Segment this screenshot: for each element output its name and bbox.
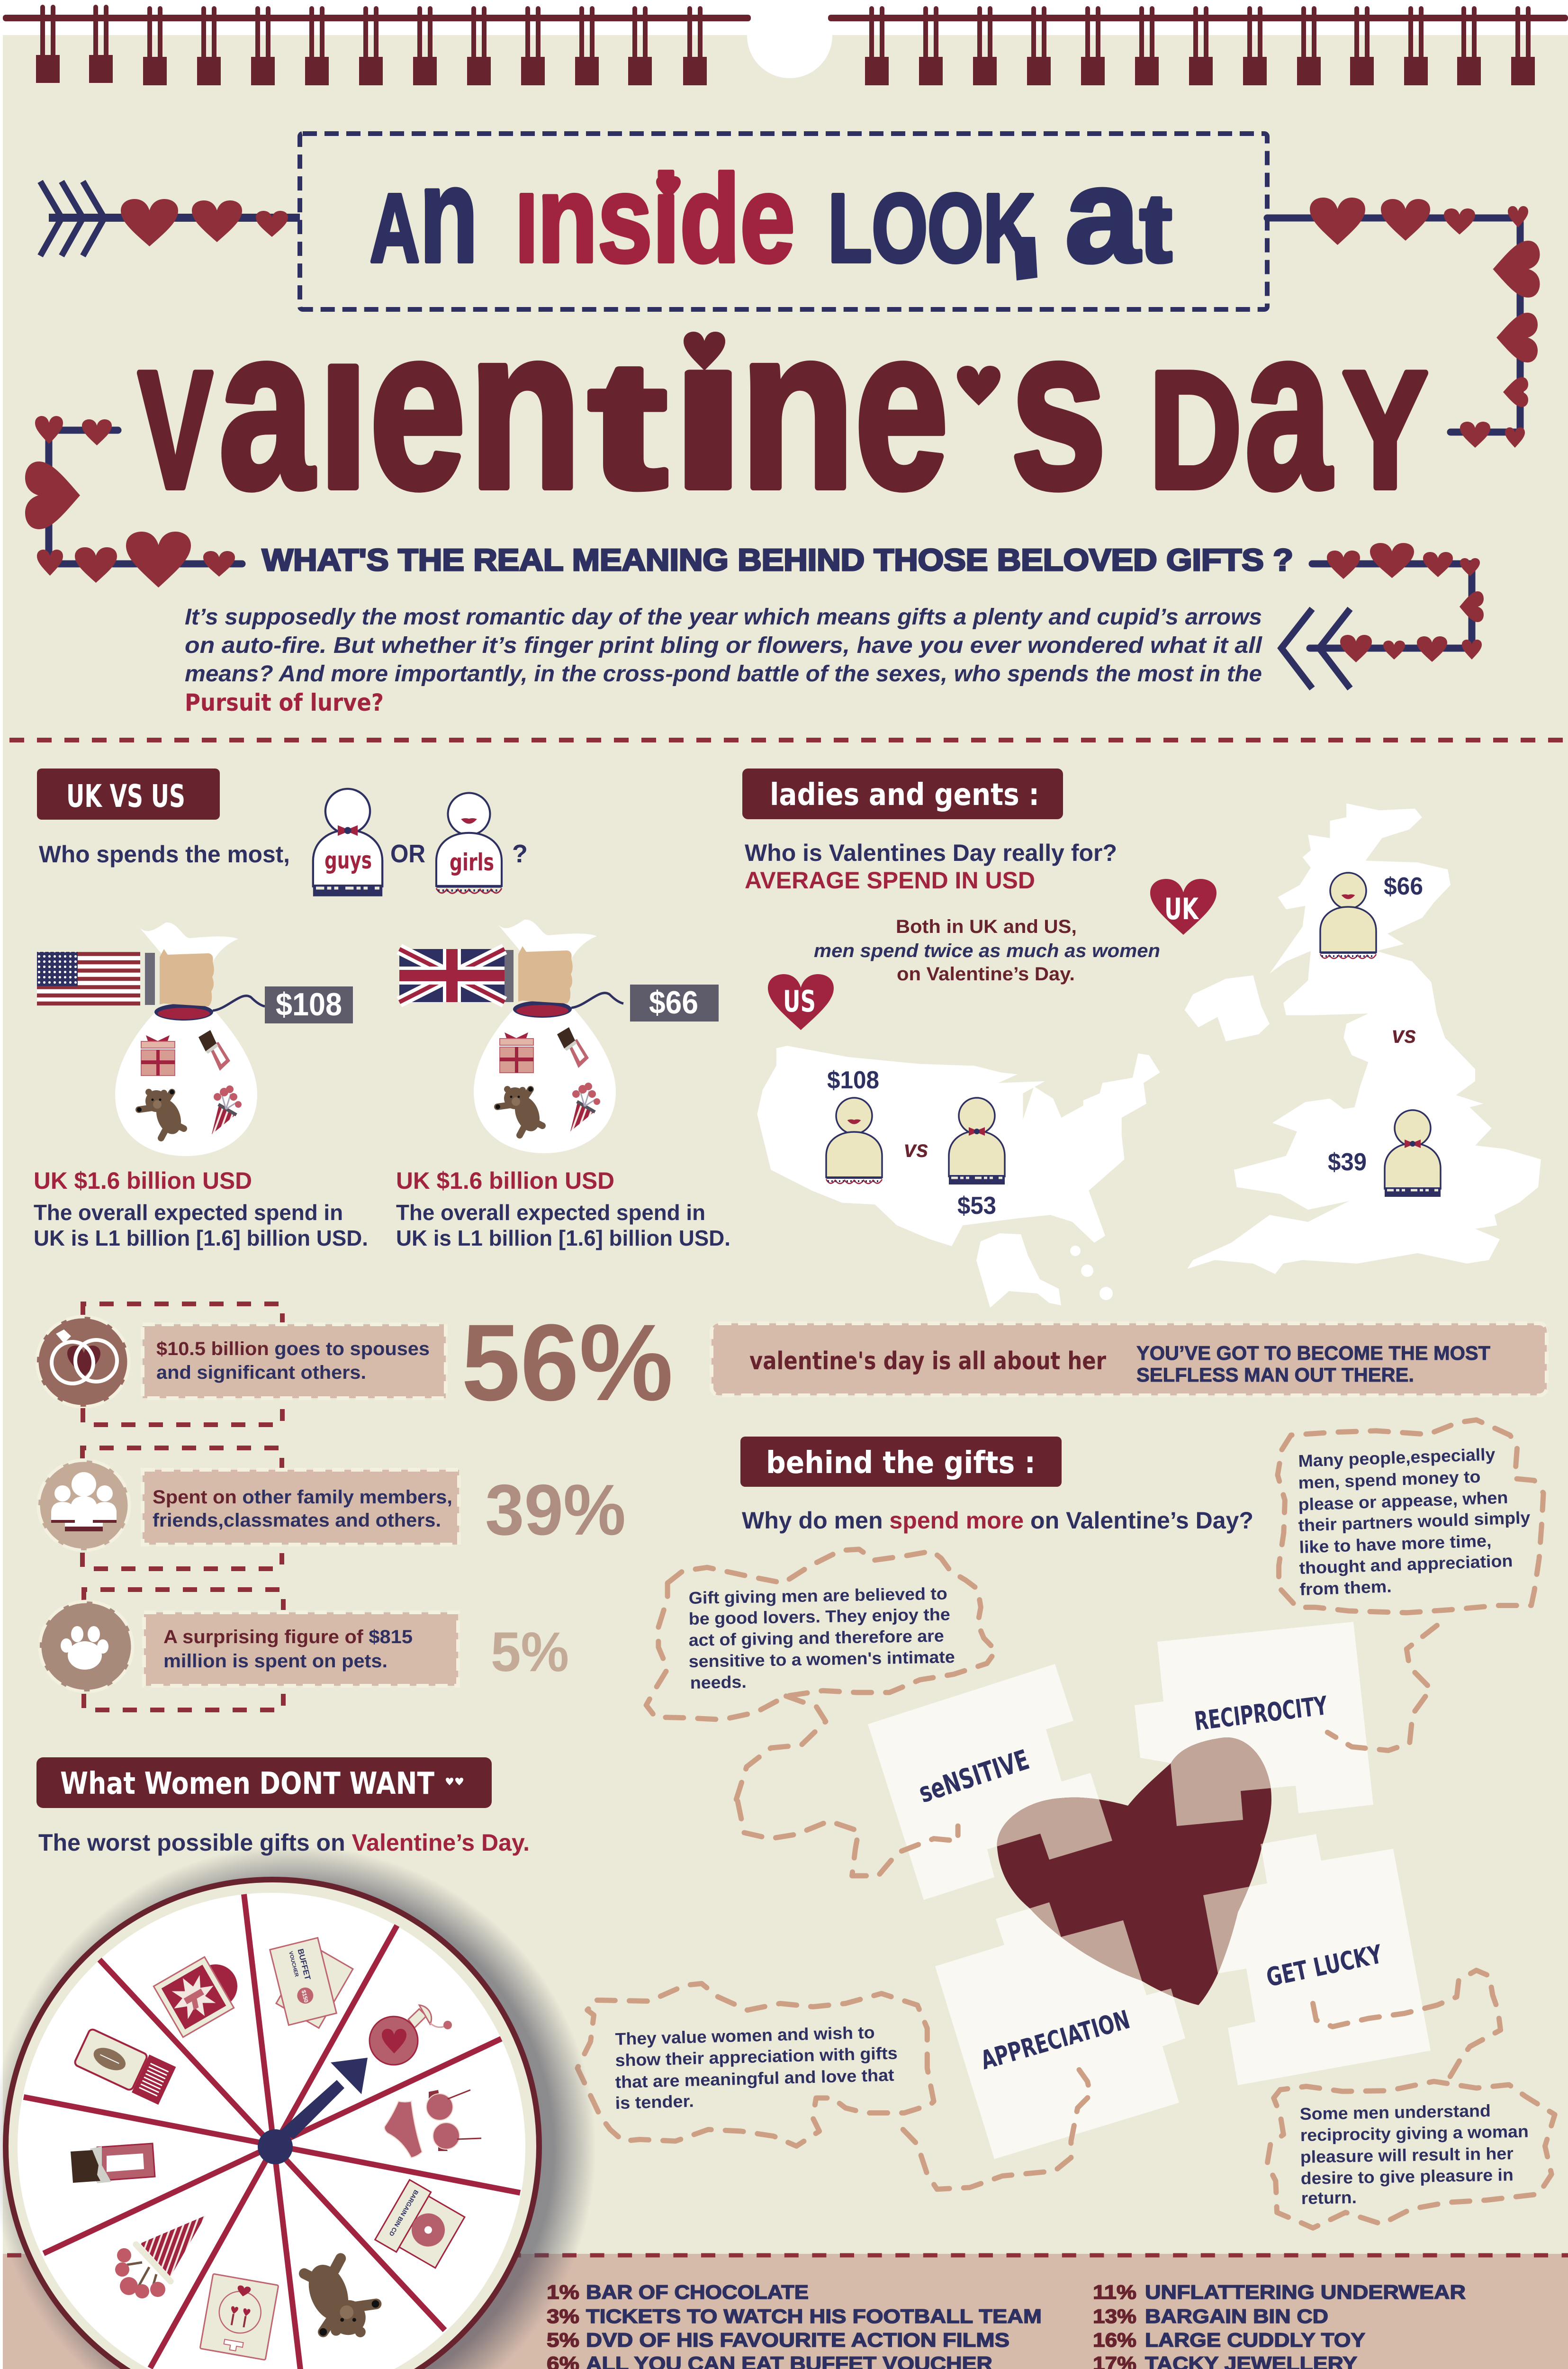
heart badge: US: US: [783, 984, 816, 1019]
title: An Inside Look at: [370, 140, 1172, 290]
arrow with hearts, top left: [40, 181, 300, 256]
thought bubble: good lovers: [646, 1549, 996, 1876]
arrow with hearts, middle right: [1281, 543, 1484, 688]
thought bubble: reciprocity: reciprocity giving a woman: [1300, 2122, 1529, 2145]
thought bubble: please or appease: Many people,especially: [1298, 1445, 1496, 1471]
list: worst gifts left column: 3%: [547, 2305, 579, 2327]
note: men spend twice: on Valentine’s Day.: [897, 964, 1075, 985]
heading: what women dont want: What Women DONT WANT: [60, 1766, 434, 1801]
label: vs UK: vs: [1392, 1022, 1416, 1048]
stat: 39% family: Spent on other family members,: [153, 1487, 452, 1508]
heart badge: UK: UK: [1164, 892, 1199, 926]
main title: Valentine's Day: e: [369, 280, 466, 536]
intro paragraph: It’s supposedly the most romantic day of the year which means gifts a plenty and cupid’s arrows: [185, 605, 1262, 630]
heart badge: US: [768, 974, 834, 1030]
figure: UK woman $66: [1320, 873, 1423, 958]
thought bubble: good lovers: needs.: [690, 1672, 747, 1692]
arrow line with hearts, middle left: [25, 416, 242, 588]
list: worst gifts right column: 11%: [1093, 2281, 1136, 2303]
calendar spiral rings: [3, 7, 1568, 85]
icon: buffet vouchers: $150: [300, 1989, 310, 2003]
question: who is Valentines Day for: Who is Valentines Day really for?: [745, 840, 1117, 866]
icon: chocolate bar: [71, 2143, 155, 2183]
banner: all about her: [712, 1323, 1547, 1395]
wheel shadow: [0, 1848, 596, 2369]
thought bubble: please or appease: thought and appreciation: [1299, 1551, 1513, 1578]
thought bubble: appreciation: is tender.: [615, 2091, 694, 2113]
label: vs US: vs: [904, 1136, 928, 1162]
thought bubble: good lovers: sensitive to a women's intimate: [688, 1647, 955, 1671]
money bag: UK: [399, 920, 719, 1153]
heading: UK VS US: UK VS US: [66, 778, 185, 814]
list: worst gifts left column: [547, 2281, 1042, 2369]
intro paragraph: means? And more importantly, in the cross-pond battle of the sexes, who spends the most in the: [185, 661, 1262, 687]
icon: paw: [40, 1601, 133, 1691]
bottom band: [3, 2254, 1568, 2369]
figure: guys: guys: [324, 847, 372, 874]
question: who spends the most: Who spends the most,: [39, 841, 290, 868]
question mark: ?: [512, 840, 528, 868]
intro paragraph: on auto-fire. But whether it’s finger print bling or flowers, have you ever wondered what it all: [185, 633, 1263, 658]
list: worst gifts right column: LARGE CUDDLY TOY: [1145, 2329, 1365, 2351]
stat: 56% spouses: [37, 1302, 673, 1425]
main title: Valentine's Day: a: [1245, 280, 1332, 536]
figure: UK man $39: [1328, 1110, 1441, 1197]
main title: Valentine's Day: n: [740, 280, 855, 536]
heading: ladies and gents: ladies and gents :: [770, 778, 1039, 813]
icon: bargain bin CD: [375, 2180, 467, 2273]
list: worst gifts left column: 5%: [547, 2329, 579, 2351]
banner: all about her: YOU’VE GOT TO BECOME THE MOST: [1136, 1342, 1490, 1364]
price tag: $66: [630, 985, 719, 1022]
thought bubble: please or appease: [1278, 1420, 1543, 1750]
price tag: $108: $108: [276, 986, 342, 1022]
title: An Inside Look at: An: [370, 140, 478, 290]
arrow line with hearts, top right: [1267, 198, 1540, 448]
figure: girls: [436, 793, 502, 893]
icon: teddy bear: [302, 2259, 379, 2337]
main title: Valentine's Day: e: [855, 280, 948, 536]
figure: US woman $108: $108: [827, 1067, 879, 1094]
thought bubble: please or appease: men, spend money to: [1298, 1467, 1481, 1492]
thought bubble: reciprocity: Some men understand: [1299, 2101, 1491, 2124]
banner: all about her: SELFLESS MAN OUT THERE.: [1136, 1364, 1414, 1386]
thought bubble: good lovers: act of giving and therefore are: [688, 1626, 944, 1650]
caption: left spend: UK $1.6 billion USD: [34, 1167, 252, 1194]
subheading: worst possible gifts: The worst possible gifts on Valentine’s Day.: [38, 1829, 530, 1856]
icon: football tickets: [73, 2027, 176, 2105]
word: OR: OR: [390, 840, 425, 868]
caption: right spend: The overall expected spend in: [396, 1200, 705, 1225]
thought bubble: reciprocity: [1267, 1970, 1555, 2228]
stat: 39% family: [38, 1448, 626, 1569]
icon: buffet vouchers: [270, 1938, 353, 2028]
map: UK: [1185, 804, 1541, 1274]
figure: girls: girls: [450, 849, 494, 876]
icon: petrol station flowers: [115, 2215, 206, 2298]
heading: behind the gifts: behind the gifts :: [766, 1446, 1036, 1481]
heart badge: UK: [1150, 879, 1217, 935]
puzzle label: Get Lucky: GET LUCKY: [1264, 1939, 1385, 1993]
main title: Valentine's Day: s: [1010, 280, 1107, 536]
note: men spend twice: men spend twice as much as women: [814, 940, 1160, 961]
thought bubble: reciprocity: pleasure will result in her: [1300, 2143, 1514, 2167]
figure: US man $53: $53: [957, 1192, 996, 1220]
stat: 5% pets: A surprising figure of $815: [163, 1627, 413, 1647]
question: why do men spend more: Why do men spend more on Valentine’s Day?: [742, 1507, 1253, 1534]
heading: UK VS US: [37, 769, 220, 820]
thought bubble: please or appease: please or appease, when: [1298, 1488, 1508, 1514]
caption: left spend: UK is L1 billion [1.6] billion USD.: [34, 1226, 368, 1250]
thought bubble: appreciation: They value women and wish to: [615, 2023, 875, 2049]
icon: underwear: [385, 2090, 481, 2158]
list: worst gifts left column: DVD OF HIS FAVOURITE ACTION FILMS: [586, 2329, 1009, 2351]
thought bubble: good lovers: be good lovers. They enjoy the: [688, 1604, 950, 1628]
caption: right spend: UK is L1 billion [1.6] billion USD.: [396, 1226, 730, 1250]
icon: wedding rings: [37, 1317, 129, 1407]
figure: US woman $108: [826, 1067, 882, 1184]
stat: 5% pets: million is spent on pets.: [163, 1651, 387, 1672]
list: worst gifts right column: UNFLATTERING UNDERWEAR: [1145, 2281, 1466, 2303]
flag: US: [37, 952, 140, 1005]
question: who is Valentines Day for: AVERAGE SPEND IN USD: [745, 867, 1035, 894]
stat: 56% spouses: and significant others.: [156, 1362, 366, 1383]
puzzle label: Reciprocity: RECIPROCITY: [1193, 1691, 1329, 1736]
wheel spokes: [24, 1894, 520, 2369]
main title: Valentine's Day: n: [469, 280, 582, 536]
main title: Valentine's Day: V: [138, 337, 213, 523]
intro paragraph: Pursuit of lurve?: [185, 689, 384, 716]
subtitle: WHAT'S THE REAL MEANING BEHIND THOSE BELOVED GIFTS ?: [262, 543, 1293, 577]
icon: family: [38, 1460, 129, 1550]
icon: DVD: [153, 1957, 237, 2037]
list: worst gifts left column: TICKETS TO WATCH HIS FOOTBALL TEAM: [586, 2305, 1042, 2327]
puzzle label: Appreciation: APPRECIATION: [977, 2005, 1133, 2075]
list: worst gifts left column: 1%: [547, 2281, 579, 2303]
main title: Valentine's Day: t: [589, 324, 667, 525]
calendar hanger notch: [747, 0, 832, 78]
thought bubble: appreciation: that are meaningful and love that: [615, 2065, 894, 2092]
thought bubble: reciprocity: desire to give pleasure in: [1300, 2165, 1514, 2188]
question: who is Valentines Day for: [745, 840, 1117, 894]
icon: buffet vouchers: BUFFET: [296, 1948, 312, 1981]
icon: perfume: [369, 2005, 452, 2065]
heading: what women dont want: [36, 1757, 492, 1808]
note: men spend twice: [814, 916, 1160, 985]
figure: guys: [313, 789, 382, 896]
thought bubble: appreciation: [577, 1983, 1090, 2189]
stat: 56% spouses: 56%: [461, 1302, 673, 1423]
main title: Valentine's Day: [138, 280, 1428, 536]
map: US: [757, 1046, 1160, 1308]
intro paragraph: [185, 605, 1263, 716]
thought bubble: please or appease: from them.: [1299, 1576, 1392, 1599]
list: worst gifts left column: BAR OF CHOCOLATE: [586, 2281, 809, 2303]
main title: Valentine's Day: I: [673, 337, 744, 523]
stat: 39% family: friends,classmates and others.: [153, 1510, 441, 1531]
stat: 5% pets: [40, 1590, 569, 1710]
wheel pointer: [258, 2058, 368, 2164]
caption: right spend: [396, 1167, 730, 1250]
thought bubble: please or appease: their partners would simply: [1298, 1508, 1531, 1535]
flag: UK: [399, 949, 505, 1002]
banner: all about her: valentine's day is all about her: [749, 1347, 1106, 1375]
stat: 39% family: 39%: [485, 1470, 626, 1550]
list: worst gifts right column: [1093, 2281, 1466, 2369]
list: worst gifts right column: 13%: [1093, 2305, 1136, 2327]
heading: ladies and gents: [742, 769, 1063, 819]
title: An Inside Look at: LOOK: [828, 174, 1035, 282]
gift wheel: [6, 1880, 539, 2369]
thought bubble: reciprocity: return.: [1301, 2188, 1357, 2208]
thought bubble: appreciation: show their appreciation with gifts: [615, 2043, 898, 2070]
price tag: $66: $66: [649, 985, 698, 1021]
main title: Valentine's Day: D: [1149, 337, 1242, 523]
main title: Valentine's Day: l: [319, 337, 368, 523]
main title: Valentine's Day: Y: [1343, 337, 1428, 523]
main title: Valentine's Day: a: [219, 280, 315, 536]
caption: right spend: UK $1.6 billion USD: [396, 1167, 614, 1194]
note: men spend twice: Both in UK and US,: [896, 916, 1077, 937]
thought bubble: good lovers: Gift giving men are believed to: [688, 1583, 947, 1608]
stat: 56% spouses: $10.5 billion goes to spouses: [156, 1338, 430, 1359]
title: An Inside Look at: at: [1065, 140, 1172, 290]
figure: UK man $39: $39: [1328, 1148, 1367, 1176]
figure: UK woman $66: $66: [1384, 873, 1423, 900]
title frame: dashed box: [300, 134, 1267, 309]
caption: left spend: [34, 1167, 368, 1250]
icon: bargain bin CD: BARGAIN BIN CD: [387, 2189, 420, 2237]
figure: US man $53: [949, 1098, 1005, 1220]
stat: 5% pets: 5%: [491, 1621, 569, 1683]
icon: tacky jewellery: [200, 2274, 279, 2360]
puzzle: pieces and heart: [868, 1622, 1431, 2159]
icon: buffet vouchers: VOUCHER: [288, 1951, 299, 1978]
thought bubble: please or appease: like to have more time,: [1299, 1531, 1492, 1557]
list: worst gifts right column: BARGAIN BIN CD: [1145, 2305, 1328, 2327]
money bag: US: [37, 922, 353, 1156]
puzzle label: Sensitive: seNSITIVE: [915, 1743, 1033, 1809]
title: An Inside Look at: Inside: [516, 149, 795, 288]
heading: behind the gifts: [740, 1437, 1062, 1487]
caption: left spend: The overall expected spend in: [34, 1200, 343, 1225]
list: worst gifts right column: 16%: [1093, 2329, 1136, 2351]
